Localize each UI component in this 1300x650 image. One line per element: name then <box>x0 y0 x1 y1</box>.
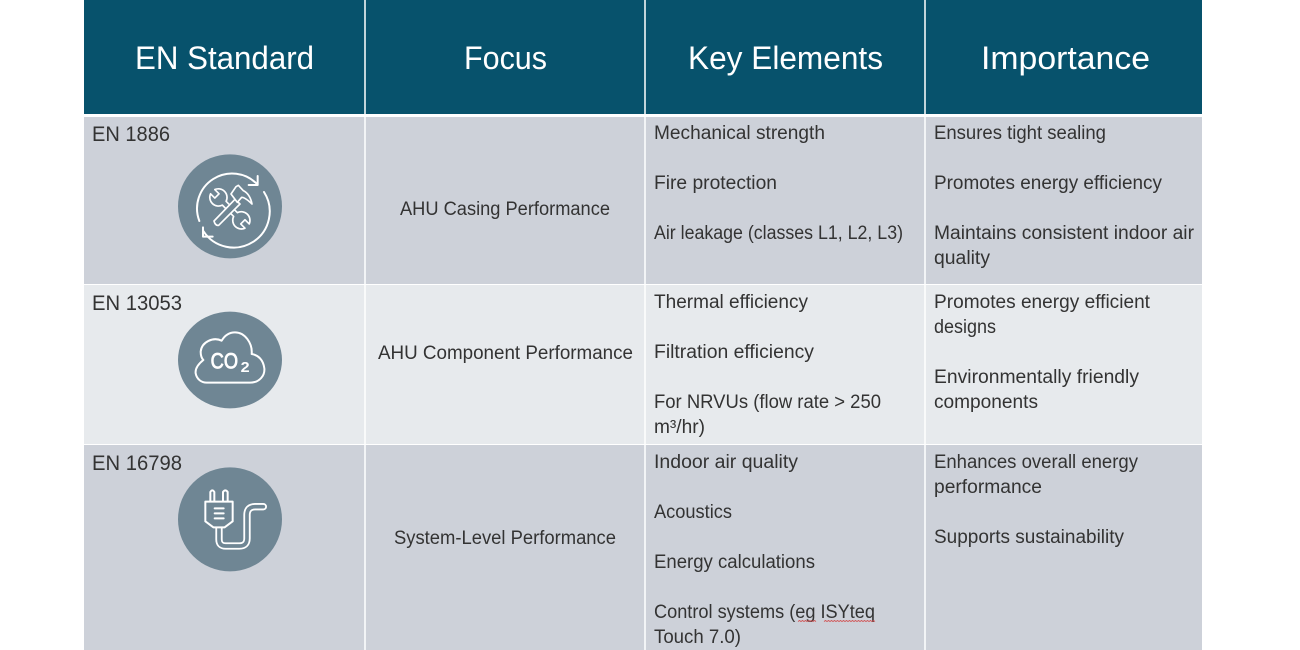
key elements: Fire protection <box>654 173 777 194</box>
row: EN 13053 <box>92 292 1151 438</box>
importance: Enhances overall energy <box>934 452 1138 473</box>
icon: CO2 cloud: 2 <box>241 360 250 376</box>
table header: Importance <box>981 40 1150 76</box>
icon: tools in refresh cycle <box>178 154 282 258</box>
key elements <box>654 123 903 244</box>
key elements: Filtration efficiency <box>654 342 815 363</box>
key elements <box>654 452 875 648</box>
key elements: Touch 7.0) <box>654 627 741 648</box>
importance: components <box>934 392 1038 413</box>
importance: Promotes energy efficiency <box>934 173 1162 194</box>
key elements: Acoustics <box>654 502 732 523</box>
key elements: Thermal efficiency <box>654 292 808 313</box>
key elements: Control systems (eg ISYteq <box>654 602 875 623</box>
key elements: Energy calculations <box>654 552 815 573</box>
table header: Focus <box>464 40 547 76</box>
importance: Ensures tight sealing <box>934 123 1106 144</box>
importance: Promotes energy efficient <box>934 292 1151 313</box>
importance <box>934 452 1138 548</box>
icon: electric plug <box>178 467 282 571</box>
key elements: Indoor air quality <box>654 452 799 473</box>
importance: Maintains consistent indoor air <box>934 223 1195 244</box>
importance: designs <box>934 317 996 338</box>
key elements: Air leakage (classes L1, L2, L3) <box>654 223 903 244</box>
importance <box>934 292 1151 413</box>
key elements: Mechanical strength <box>654 123 825 144</box>
importance: performance <box>934 477 1042 498</box>
icon: CO2 cloud: CO <box>211 348 238 373</box>
key elements <box>654 292 881 438</box>
importance: Environmentally friendly <box>934 367 1140 388</box>
standard name: EN 13053 <box>92 292 182 315</box>
icon: CO2 cloud <box>178 312 282 408</box>
row: EN 16798 <box>92 452 1138 648</box>
standard name: EN 16798 <box>92 452 182 475</box>
key elements: m³/hr) <box>654 417 705 438</box>
key elements: For NRVUs (flow rate > 250 <box>654 392 881 413</box>
table header <box>135 40 1150 76</box>
row: EN 1886 <box>92 123 1195 269</box>
importance <box>934 123 1195 269</box>
importance: quality <box>934 248 991 269</box>
focus: AHU Casing Performance <box>400 199 610 220</box>
table header: EN Standard <box>135 40 314 76</box>
standard name: EN 1886 <box>92 123 170 146</box>
focus: AHU Component Performance <box>378 343 633 364</box>
importance: Supports sustainability <box>934 527 1124 548</box>
table header: Key Elements <box>688 40 883 76</box>
focus: System-Level Performance <box>394 528 616 549</box>
